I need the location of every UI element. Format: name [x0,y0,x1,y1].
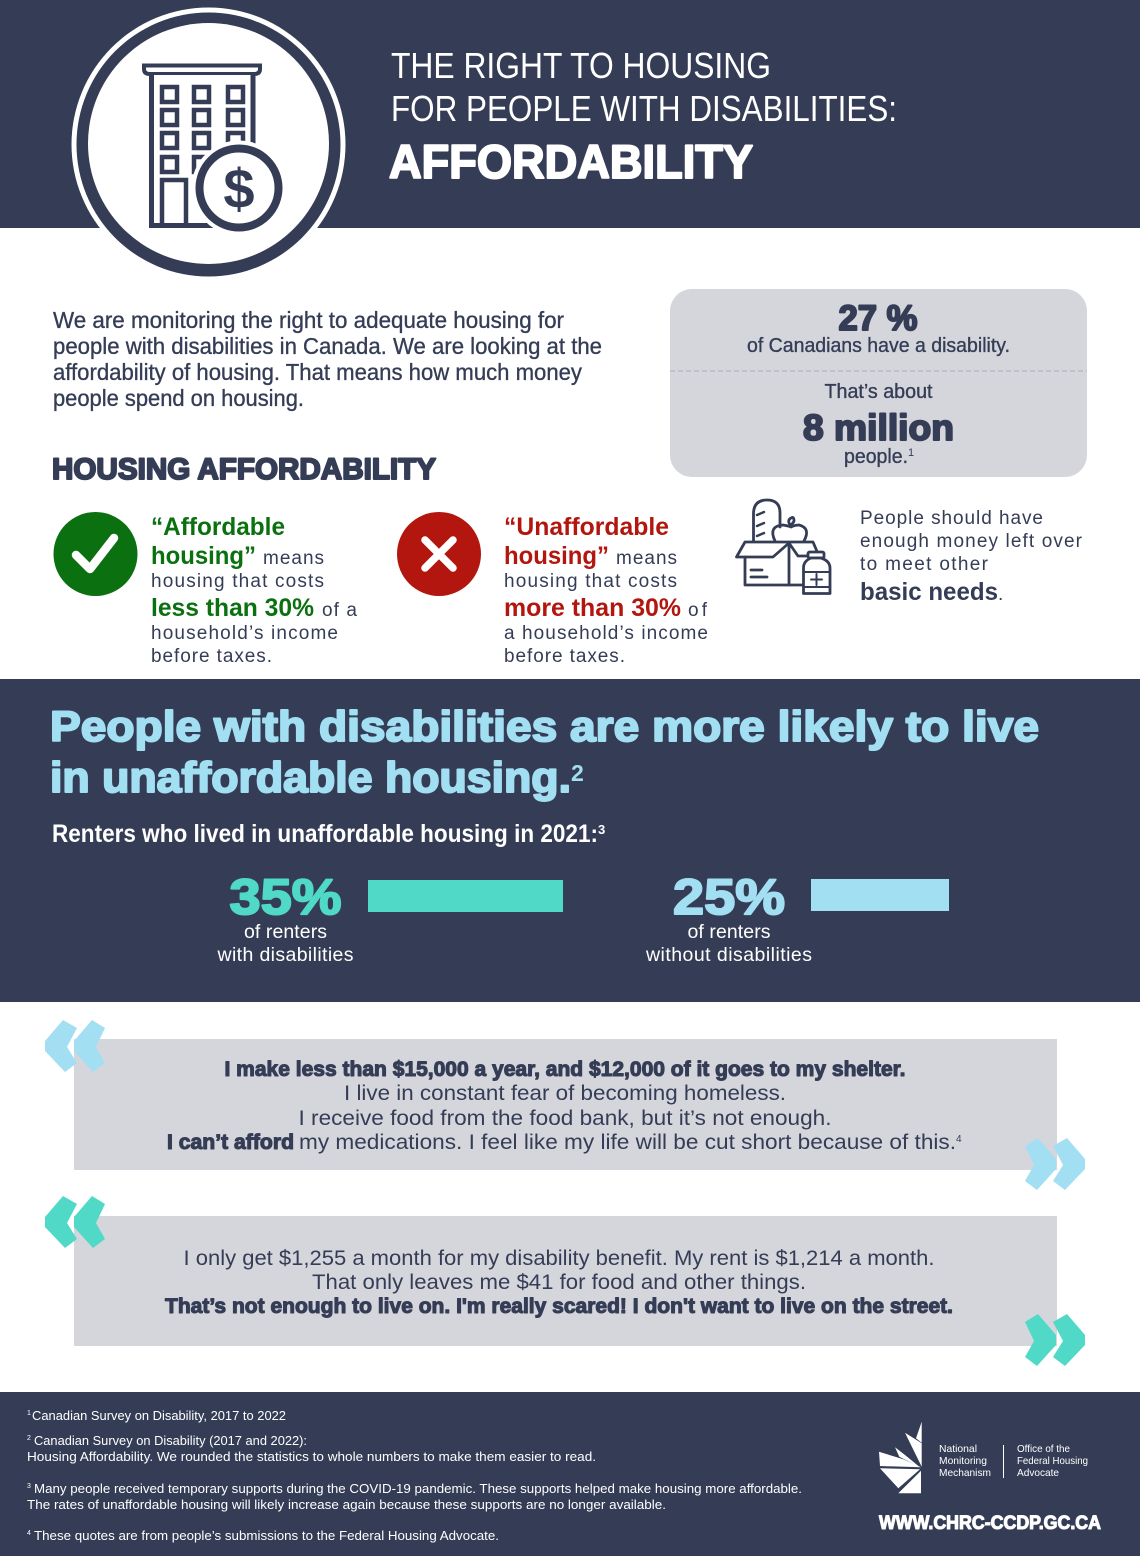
footer band [0,1392,1140,1556]
icon: opening quote marks [45,1196,105,1248]
panel: disability statistics: people. [844,446,908,468]
definition: affordable housing: less than 30% [151,594,314,622]
subheading: 3 [598,822,605,837]
footnotes: The rates of unaffordable housing will likely increase again because these supports are no longer available. [27,1497,666,1512]
quote 1: 4 [956,1134,962,1145]
definition: affordable housing: “Affordable [151,513,285,541]
definition: unaffordable housing: means [616,548,677,569]
stat: 35 percent: with disabilities [216,944,354,966]
definition: affordable housing: household’s income [151,623,338,644]
stat: 25 percent: of renters [688,921,771,943]
intro text: people spend on housing. [53,385,304,411]
definition: affordable housing: before taxes. [151,646,272,667]
icon: box of food and medicine [736,500,830,594]
headline: in unaffordable housing. [50,754,571,802]
stat: 25 percent [645,869,949,966]
definition: affordable housing: housing that costs [151,571,324,592]
icon: building with dollar coin in circle: $ [223,157,255,220]
quote 1: I make less than $15,000 a year, and $12,000 of it goes to my shelter. [224,1058,906,1081]
footnotes: These quotes are from people’s submissions to the Federal Housing Advocate. [34,1528,499,1543]
quote 1 [45,1020,1085,1190]
footnotes: Many people received temporary supports during the COVID-19 pandemic. These supports helped make housing more affordable. [34,1481,802,1496]
footnotes: Housing Affordability. We rounded the statistics to whole numbers to make them easier to read. [27,1449,596,1464]
stat: 25 percent: 25% [673,869,785,925]
footnotes: Canadian Survey on Disability (2017 and 2022): [34,1433,307,1448]
panel: disability statistics: That’s about [824,381,933,403]
footnotes: 1 [27,1410,31,1417]
text: basic needs: basic needs [860,578,998,606]
definition: unaffordable housing: of [688,600,708,621]
headline: People with disabilities are more likely to live [50,703,1039,751]
logo: maple leaf and organization names: Office of the [1017,1443,1070,1455]
footnotes: 3 [27,1483,31,1490]
title: AFFORDABILITY [389,135,753,188]
icon: green check [54,512,138,596]
definition: affordable housing: means [263,548,324,569]
quote 1: I can’t afford [167,1131,294,1154]
quote 1: I receive food from the food bank, but it’s not enough. [298,1107,832,1130]
icon: closing quote marks [1025,1138,1085,1190]
text: basic needs: enough money left over [860,531,1083,552]
definition: unaffordable housing: before taxes. [504,646,625,667]
logo: maple leaf and organization names [879,1422,1088,1493]
headline: 2 [571,760,584,786]
title: FOR PEOPLE WITH DISABILITIES: [391,88,897,129]
footnotes: 4 [27,1530,31,1537]
footnotes [27,1408,802,1543]
definition: affordable housing: housing” [151,542,256,570]
icon: building with dollar coin in circle [72,8,346,282]
intro text: We are monitoring the right to adequate housing for [53,307,564,333]
quote 2: That’s not enough to live on. I'm really scared! I don't want to live on the street. [165,1295,953,1318]
definition: unaffordable housing: more than 30% [504,594,681,622]
panel: disability statistics: 27 % [838,299,918,338]
logo: maple leaf and organization names: Federal Housing [1017,1455,1088,1467]
icon: opening quote marks [45,1020,105,1072]
title [389,45,897,188]
website address: WWW.CHRC-CCDP.GC.CA [879,1513,1101,1534]
panel: disability statistics [670,289,1087,477]
intro text: affordability of housing. That means how much money [53,359,582,385]
footnotes: Canadian Survey on Disability, 2017 to 2022 [32,1408,286,1423]
footnotes: 2 [27,1435,31,1442]
definition: affordable housing: of a [322,600,357,621]
logo: maple leaf and organization names: National [939,1443,977,1455]
panel: disability statistics: 1 [908,447,914,459]
definition: unaffordable housing: a household’s income [504,623,708,644]
heading: housing affordability: HOUSING AFFORDABILITY [52,453,436,486]
icon: red cross [397,512,481,596]
definition: unaffordable housing: housing that costs [504,571,677,592]
text: basic needs [860,508,1083,606]
quote 1: my medications. I feel like my life will be cut short because of this. [299,1131,956,1154]
quote 2 [45,1196,1085,1366]
panel: disability statistics: 8 million [803,407,954,448]
text: basic needs: People should have [860,508,1043,529]
quote 1: I live in constant fear of becoming homeless. [344,1082,786,1105]
panel: renters comparison [0,679,1140,1002]
definition: unaffordable housing: housing” [504,542,609,570]
stat: 35 percent: of renters [244,921,327,943]
intro text: people with disabilities in Canada. We are looking at the [53,333,602,359]
logo: maple leaf and organization names: Advocate [1017,1467,1059,1479]
icon: closing quote marks [1025,1314,1085,1366]
stat: 35 percent [216,869,563,966]
stat: 25 percent: without disabilities [645,944,812,966]
panel: disability statistics: of Canadians have a disability. [747,335,1010,357]
logo: maple leaf and organization names: Monitoring [939,1455,987,1467]
headline [50,703,1039,802]
quote 2: I only get $1,255 a month for my disability benefit. My rent is $1,214 a month. [184,1247,934,1270]
definition: unaffordable housing [504,513,708,667]
intro text [53,307,602,411]
stat: 35 percent: 35% [230,869,342,925]
text: basic needs: to meet other [860,554,989,575]
logo: maple leaf and organization names: Mechanism [939,1467,991,1479]
quote 2: That only leaves me $41 for food and other things. [312,1271,806,1294]
title: THE RIGHT TO HOUSING [391,45,771,86]
definition: unaffordable housing: “Unaffordable [504,513,669,541]
text: basic needs: . [998,584,1003,605]
header band [0,0,1140,228]
subheading: Renters who lived in unaffordable housing in 2021: [52,820,598,848]
definition: affordable housing [151,513,357,667]
